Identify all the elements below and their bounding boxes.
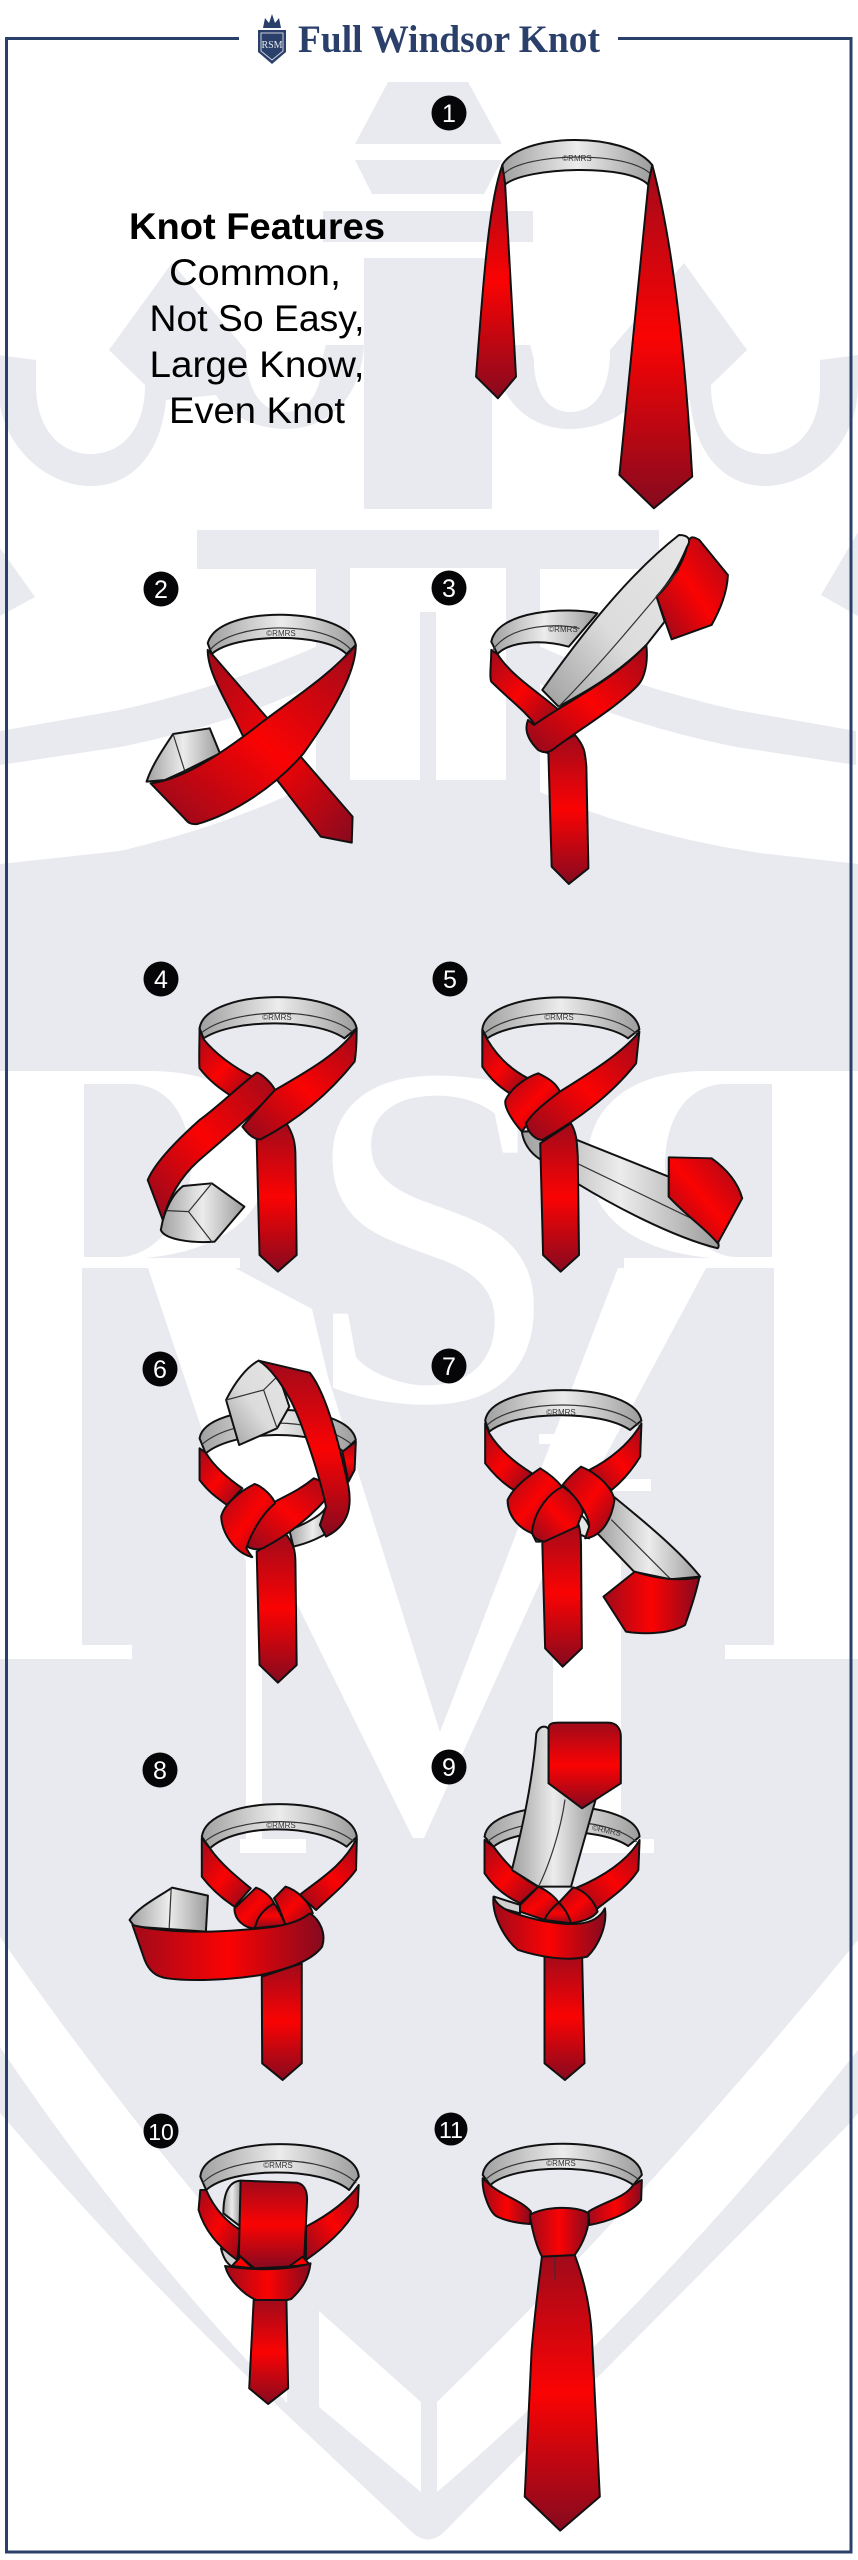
number badge 5 [432, 962, 468, 996]
collar mark: ©RMRS [548, 625, 578, 634]
collar mark: ©RMRS [266, 1821, 296, 1830]
number badge 8: 8 [153, 1757, 167, 1785]
number badge 7 [432, 1348, 466, 1384]
number badge 7: 7 [442, 1353, 456, 1381]
number badge 10 [144, 2114, 178, 2148]
tie illustration 2 [147, 615, 356, 843]
text block: knot features: Common, [169, 252, 341, 293]
logo: crest shield with crown [258, 14, 286, 64]
step 6: wide end up through the neck loop [142, 1352, 356, 1683]
step 10: wide end pulled down through the front [144, 2114, 359, 2404]
number badge 6: 6 [153, 1356, 167, 1384]
collar mark: ©RMRS [562, 154, 592, 163]
tie illustration 8 [130, 1804, 357, 2080]
number badge 3: 3 [442, 575, 456, 603]
tie illustration 9 [485, 1723, 640, 2080]
collar mark: ©RMRS [263, 2161, 293, 2170]
collar mark: ©RMRS [591, 1823, 622, 1838]
collar mark: ©RMRS [262, 1013, 292, 1022]
step 11: finished full Windsor knot [434, 2112, 642, 2531]
number badge 11: 11 [439, 2117, 463, 2143]
tie illustration 11 [483, 2144, 642, 2531]
number badge 3 [432, 570, 466, 606]
number badge 6 [142, 1352, 178, 1386]
tie illustration 3 [490, 535, 728, 884]
step 4: wide end pulled to the left [144, 962, 357, 1272]
watermark arch bands [0, 645, 320, 765]
text block: knot features: Even Knot [169, 390, 346, 431]
text block: knot features: Knot Features [129, 206, 385, 247]
step 3: wide end brought up through loop [432, 535, 728, 884]
tie illustration 7 [485, 1390, 700, 1667]
text block: knot features [129, 206, 385, 431]
tie illustration 10 [199, 2144, 359, 2404]
tie illustration 4 [148, 997, 357, 1272]
watermark monogram letters: S [301, 963, 563, 1506]
collar mark: ©RMRS [546, 1408, 576, 1417]
step 8: wide end wrapped left across the knot [130, 1752, 357, 2080]
number badge 2 [144, 572, 178, 606]
collar mark: ©RMRS [546, 2159, 576, 2168]
number badge 1: 1 [442, 100, 456, 128]
tie illustration 6 [200, 1361, 356, 1683]
step 1: tie draped around collar [432, 96, 692, 508]
step 5: wide end passed behind to the right [432, 962, 742, 1272]
logo: crest shield with crown: RSM [261, 40, 283, 51]
number badge 10: 10 [148, 2119, 174, 2145]
number badge 4: 4 [154, 966, 168, 994]
text block: knot features: Large Know, [150, 344, 364, 385]
watermark shield cut-outs [0, 568, 858, 2492]
tie illustration 5 [482, 997, 742, 1272]
watermark monogram letters [0, 963, 858, 1853]
watermark crown top, right half and its mirror [0, 82, 858, 765]
watermark shield body [0, 530, 858, 2540]
collar mark: ©RMRS [266, 629, 296, 638]
number badge 2: 2 [154, 576, 168, 604]
text block: knot features: Not So Easy, [150, 298, 364, 339]
step 2: wide end crossed over [144, 572, 356, 843]
step 7: wide end across the front [432, 1348, 700, 1667]
tie illustration 1 [476, 140, 692, 508]
collar mark: ©RMRS [544, 1013, 574, 1022]
number badge 9 [432, 1750, 466, 1784]
title: Full Windsor Knot [298, 18, 600, 61]
number badge 8 [142, 1752, 178, 1788]
number badge 5: 5 [443, 966, 457, 994]
number badge 1 [432, 96, 466, 130]
step 9: wide end up through the neck loop again [432, 1723, 640, 2080]
number badge 4 [144, 962, 178, 996]
number badge 11 [434, 2112, 468, 2146]
number badge 9: 9 [442, 1754, 456, 1782]
